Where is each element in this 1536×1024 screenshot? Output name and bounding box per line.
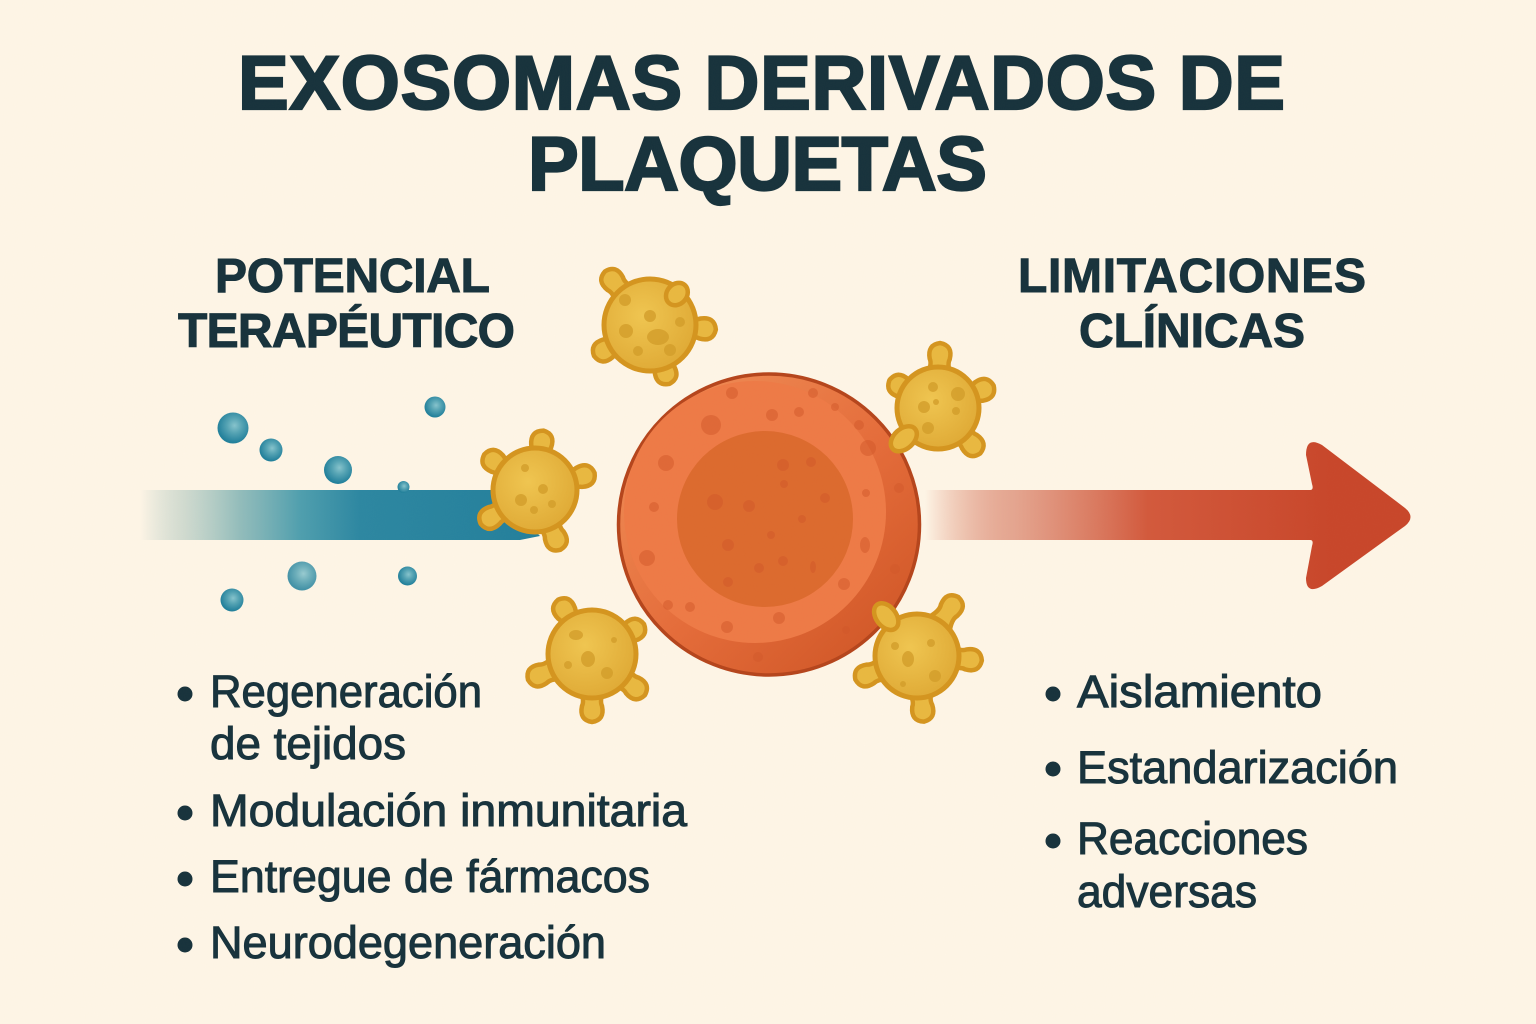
item: entrega de fármacos: Entregue de fármacos [210, 851, 650, 902]
item: reacciones adversas: Reacciones [1077, 813, 1308, 864]
heading: potencial terapéutico: TERAPÉUTICO [178, 304, 515, 358]
icon: blue vesicles [218, 396, 446, 612]
icon: platelet upper right [883, 343, 999, 462]
heading: limitaciones clínicas: CLÍNICAS [1079, 304, 1305, 358]
list: potencial terapéutico [178, 666, 688, 968]
item: reacciones adversas [1046, 813, 1308, 917]
heading: potencial terapéutico: POTENCIAL [215, 250, 490, 303]
icon: large orange cell [618, 374, 920, 675]
item: estandarización: Estandarización [1077, 742, 1398, 793]
list: limitaciones clínicas [1046, 666, 1398, 917]
icon: platelet top [588, 263, 717, 388]
icon: platelet left [474, 429, 598, 555]
item: reacciones adversas: adversas [1077, 866, 1257, 917]
title: PLAQUETAS [528, 122, 987, 207]
heading: limitaciones clínicas [1018, 250, 1366, 358]
item: aislamiento: Aislamiento [1077, 666, 1322, 717]
item: regeneración de tejidos [178, 666, 482, 769]
item: regeneración de tejidos: de tejidos [210, 718, 406, 769]
icon: platelet lower left [523, 593, 653, 722]
heading: potencial terapéutico [178, 250, 515, 358]
icon: platelet lower right [851, 590, 983, 723]
item: regeneración de tejidos: Regeneración [210, 666, 482, 717]
item: modulación inmunitaria: Modulación inmunitaria [210, 785, 688, 836]
arrow: blue band [140, 490, 540, 540]
title [238, 41, 1285, 207]
heading: limitaciones clínicas: LIMITACIONES [1018, 250, 1366, 303]
arrow: red limitations [920, 442, 1410, 589]
title: EXOSOMAS DERIVADOS DE [238, 41, 1285, 126]
item: neurodegeneración: Neurodegeneración [210, 917, 606, 968]
